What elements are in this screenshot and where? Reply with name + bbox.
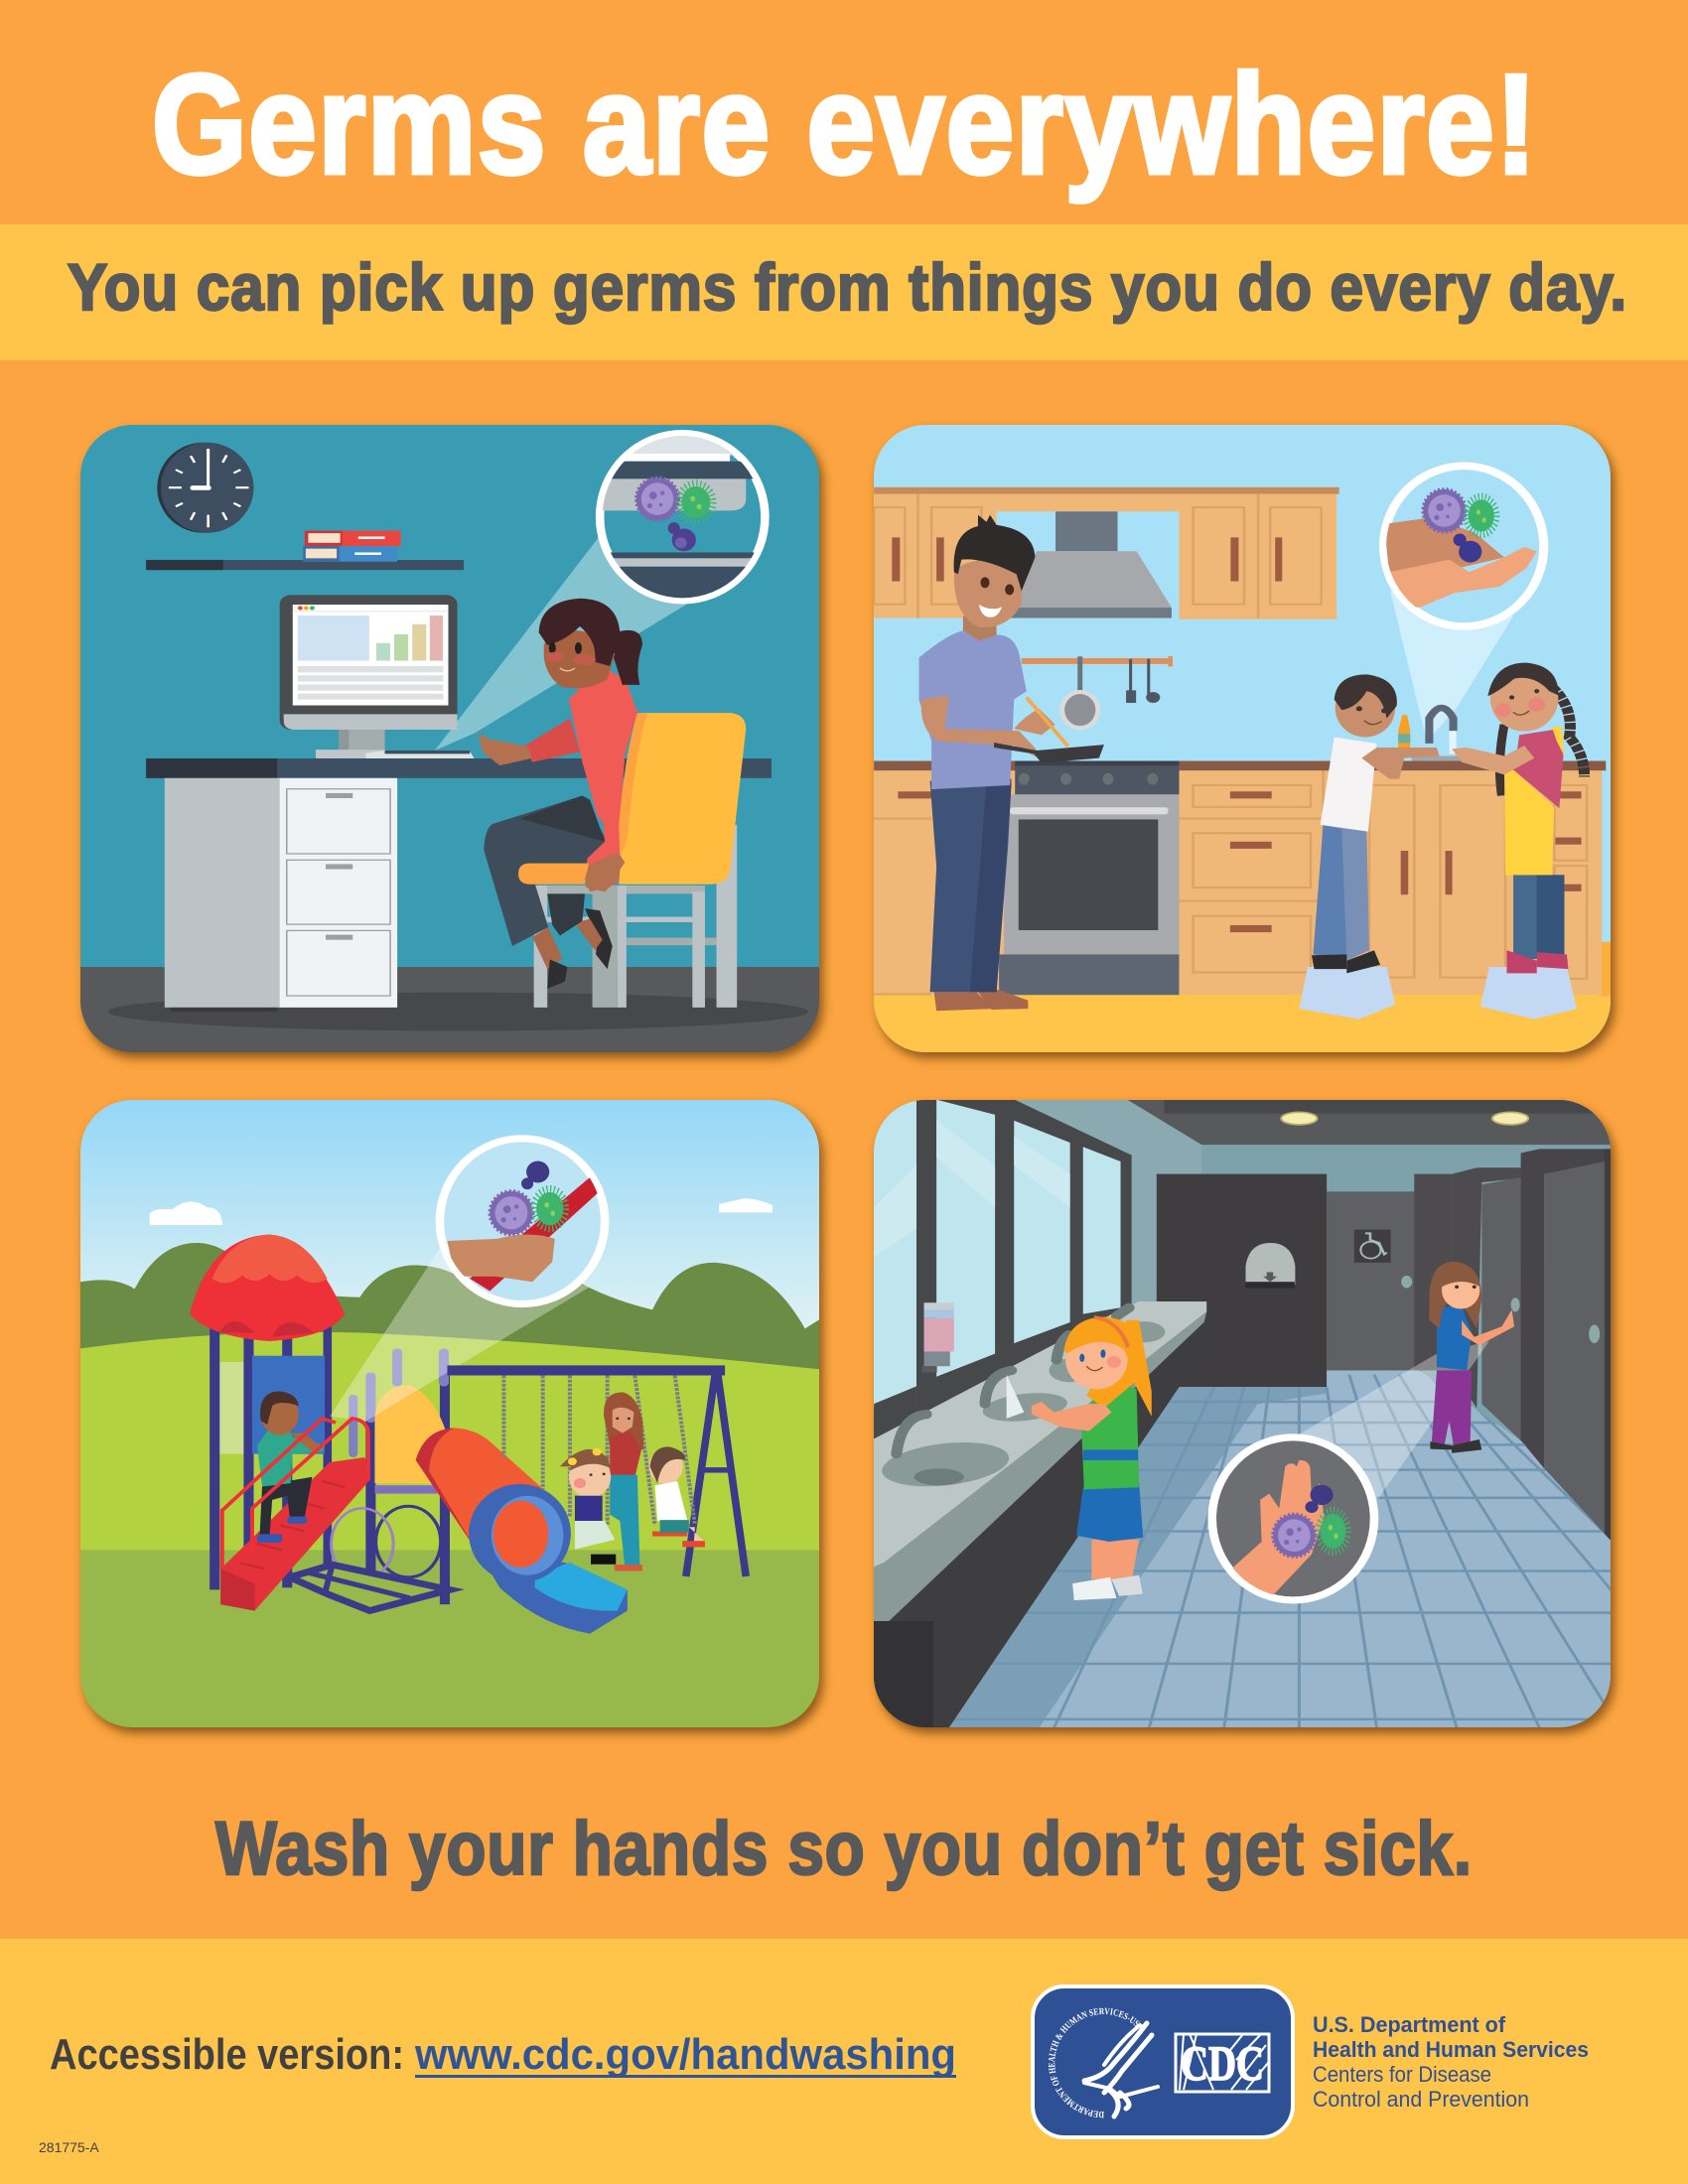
chair back and seat	[518, 713, 746, 891]
agency name: U.S. Department of	[1313, 2012, 1506, 2037]
girl by swings	[560, 1448, 616, 1565]
clouds	[150, 1198, 773, 1225]
callout: germs on hand	[1212, 1437, 1374, 1600]
agency name: Health and Human Services	[1313, 2037, 1589, 2062]
child on swing	[649, 1446, 705, 1548]
icon: wall clock	[157, 443, 253, 533]
hand dryer wall	[1157, 1174, 1327, 1387]
ceiling lights	[1281, 1112, 1528, 1125]
CDC mark: CDC	[1181, 2035, 1264, 2091]
sink counter	[869, 1301, 1206, 1729]
boy climbing stairs	[257, 1391, 325, 1543]
light beam	[1390, 591, 1513, 742]
stair rails	[222, 1419, 368, 1569]
mirrors	[854, 1095, 1132, 1445]
boy washing hands	[1312, 674, 1439, 973]
footer band	[0, 1939, 1688, 2184]
grass	[80, 1332, 819, 1727]
upper cabinets and range hood	[874, 487, 1339, 619]
stove and oven	[999, 761, 1179, 995]
panel: office	[60, 407, 860, 1075]
computer monitor	[280, 595, 475, 759]
callout: germs on railing	[440, 1139, 605, 1304]
step stools	[1299, 967, 1577, 1020]
website link: www.cdc.gov/handwashing	[414, 2030, 956, 2079]
girl washing hands	[1452, 663, 1585, 973]
woman at desk	[479, 599, 642, 989]
girl washing at sink	[1007, 1317, 1152, 1600]
HHS seal ring text: DEPARTMENT OF HEALTH & HUMAN SERVICES-USA	[1049, 2007, 1143, 2118]
desk with filing cabinet	[146, 758, 772, 1012]
woman by swings	[604, 1392, 643, 1570]
accessible version label: Accessible version:	[50, 2030, 404, 2079]
tube slide	[416, 1429, 628, 1634]
callout: germs on keyboard	[600, 432, 765, 605]
red stairs	[220, 1457, 370, 1610]
man cooking	[918, 515, 1104, 1011]
logo: HHS and CDC	[1031, 1984, 1295, 2139]
agency name: Control and Prevention	[1313, 2087, 1529, 2112]
soap dispenser	[922, 1302, 954, 1373]
floor tiles	[854, 1366, 1688, 1742]
HHS eagle	[1084, 2023, 1158, 2116]
document number: 281775-A	[39, 2139, 99, 2155]
light beam	[330, 1241, 590, 1422]
play structure	[210, 1318, 455, 1610]
chair legs	[534, 825, 737, 1008]
callout: germs on hands	[1384, 466, 1544, 626]
subtitle band	[0, 224, 1688, 360]
light beam	[1294, 1341, 1489, 1504]
red canopy	[190, 1235, 345, 1341]
panel: kitchen	[871, 424, 1621, 1065]
swing set	[447, 1365, 746, 1576]
agency name: Centers for Disease	[1313, 2062, 1491, 2087]
sink and bottle	[1398, 708, 1467, 761]
agency name	[1313, 2012, 1589, 2112]
wall shelf with books	[146, 531, 464, 570]
panel: public restroom	[854, 1082, 1688, 1750]
hills	[80, 1243, 819, 1370]
closing message: Wash your hands so you don’t get sick.	[215, 1807, 1473, 1891]
hanging utensils	[1022, 656, 1173, 730]
light beam	[435, 532, 695, 751]
girl at stall door	[1429, 1262, 1514, 1453]
panel: playground	[60, 1082, 860, 1750]
lower cabinets and counter	[874, 761, 1606, 995]
back wall and stall doors	[1327, 1149, 1615, 1546]
